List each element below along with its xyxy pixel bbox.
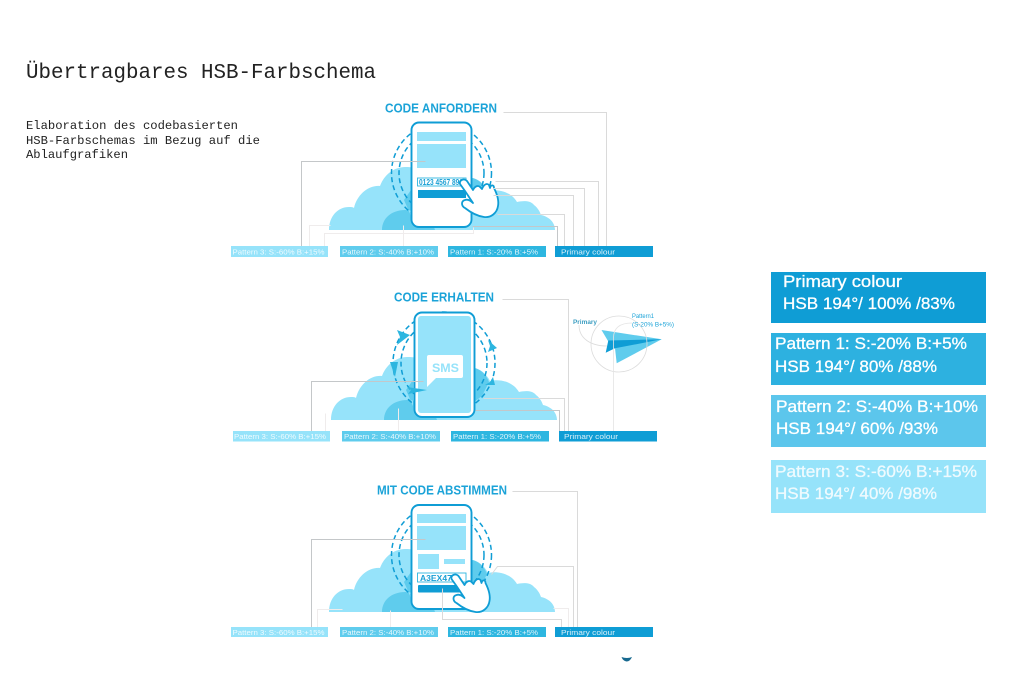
plane callout circle and labels: Pattern1	[632, 313, 654, 320]
heading: code anfordern: CODE ANFORDERN	[385, 102, 497, 116]
legend bars: Pattern 3: S:-60% B:+15%	[232, 628, 325, 637]
colour swatch: primary colour: Primary colour	[783, 272, 902, 291]
leader lines	[302, 112, 606, 246]
icon: pointing hand	[451, 575, 490, 612]
illustration: cloud	[331, 357, 557, 420]
panel: code erhalten	[233, 290, 674, 442]
icon: large paper plane	[602, 330, 662, 363]
colour swatch: pattern 2: Pattern 2: S:-40% B:+10%	[776, 397, 978, 416]
icon: sms bubble	[427, 355, 463, 387]
legend bars: Primary colour	[564, 432, 619, 441]
colour swatch: primary colour: HSB 194°/ 100% /83%	[783, 294, 955, 313]
illustration: phone	[412, 122, 472, 227]
panel: code anfordern	[231, 102, 653, 257]
heading: mit code abstimmen: MIT CODE ABSTIMMEN	[377, 484, 507, 498]
illustration: phone: 0123 4567 890	[419, 178, 463, 187]
icon: pointing hand	[460, 180, 498, 217]
intro text: HSB-Farbschemas im Bezug auf die	[26, 134, 260, 148]
legend bars: Pattern 2: S:-40% B:+10%	[342, 628, 434, 637]
illustration: cloud	[329, 549, 555, 612]
icons: small paper planes on rings	[390, 330, 497, 394]
leader lines	[312, 300, 568, 432]
legend bars: Primary colour	[561, 628, 616, 637]
colour swatch: pattern 1: Pattern 1: S:-20% B:+5%	[775, 334, 967, 353]
legend bars	[231, 246, 653, 257]
plane callout circle and labels: Primary	[573, 319, 597, 326]
leader lines	[312, 492, 578, 628]
legend bars: Pattern 1: S:-20% B:+5%	[450, 248, 538, 256]
illustration: dashed signal rings	[392, 123, 492, 223]
colour swatch: pattern 3: Pattern 3: S:-60% B:+15%	[775, 462, 977, 481]
legend bars: Pattern 1: S:-20% B:+5%	[453, 432, 541, 441]
legend bars: Pattern 2: S:-40% B:+10%	[342, 248, 434, 256]
small crescent mark	[622, 657, 632, 662]
colour swatch: pattern 2	[771, 395, 986, 447]
plane callout circle and labels	[573, 313, 674, 431]
icon: sms bubble: SMS	[432, 361, 459, 375]
legend bars: Primary colour	[561, 248, 616, 256]
colour swatch: primary colour	[771, 272, 986, 323]
panel: mit code abstimmen	[231, 484, 653, 637]
colour swatch: pattern 3	[771, 460, 986, 513]
plane callout circle and labels: (S-20% B+5%)	[632, 322, 674, 328]
legend bars	[231, 627, 653, 637]
illustration: phone: A3EX47B	[420, 573, 458, 583]
legend bars	[233, 431, 657, 442]
legend bars: Pattern 1: S:-20% B:+5%	[450, 628, 538, 637]
illustration: phone	[412, 505, 472, 609]
intro text	[26, 119, 260, 162]
legend bars: Pattern 3: S:-60% B:+15%	[232, 248, 325, 256]
intro text: Ablaufgrafiken	[26, 148, 128, 162]
colour swatch: pattern 2: HSB 194°/ 60% /93%	[776, 419, 938, 438]
illustration: dashed signal rings	[393, 312, 495, 414]
title: Übertragbares HSB-Farbschema	[26, 61, 376, 85]
colour swatch: pattern 1: HSB 194°/ 80% /88%	[775, 357, 937, 376]
colour swatch: pattern 1	[771, 333, 986, 385]
colour swatch: pattern 3: HSB 194°/ 40% /98%	[775, 484, 937, 503]
legend bars: Pattern 2: S:-40% B:+10%	[344, 432, 436, 441]
illustration: cloud	[329, 167, 555, 230]
heading: code erhalten: CODE ERHALTEN	[394, 290, 494, 304]
intro text: Elaboration des codebasierten	[26, 119, 238, 133]
illustration: phone	[414, 312, 474, 417]
illustration: dashed signal rings	[392, 505, 492, 605]
legend bars: Pattern 3: S:-60% B:+15%	[234, 432, 326, 441]
